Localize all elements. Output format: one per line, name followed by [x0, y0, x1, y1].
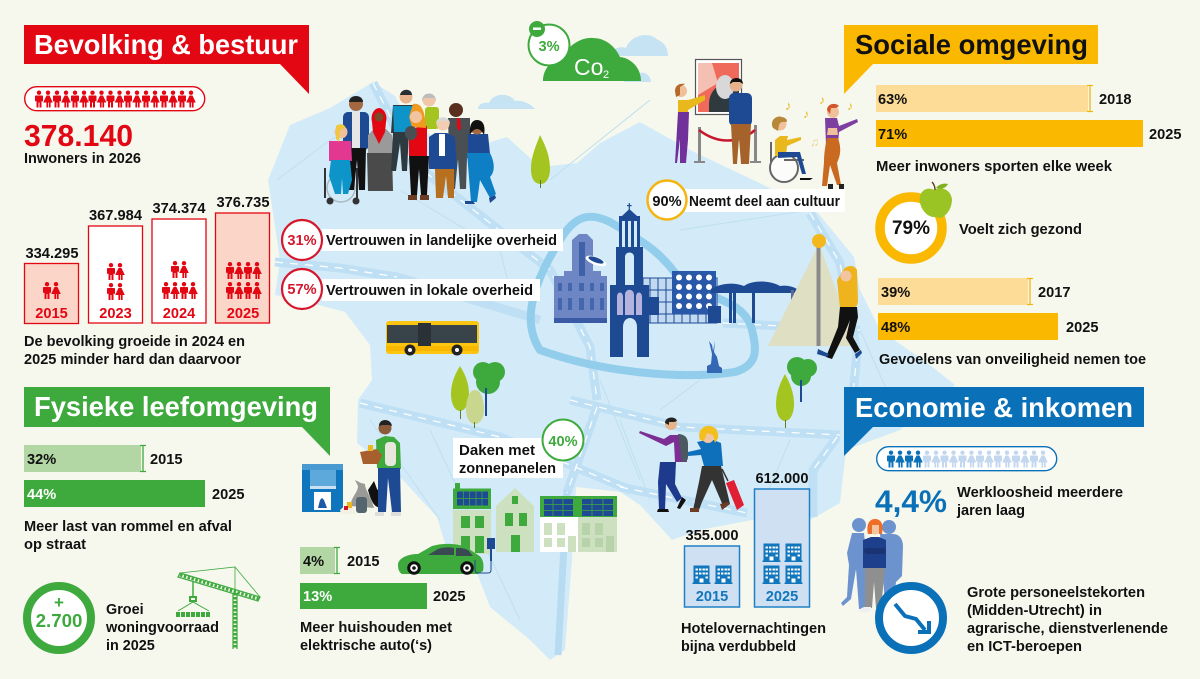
panel: bevolking & bestuur: [24, 25, 309, 368]
heading: sociale omgeving: [844, 25, 1098, 94]
bar chart: rommel: 44%: [27, 487, 56, 503]
caption: personeelstekorten: [967, 585, 1168, 655]
bar chart: elektrische auto's: 4%: [303, 554, 324, 570]
housing growth ring: [27, 586, 91, 650]
bar 2015: 2015: [35, 306, 68, 322]
illustration: man with waste and bin: [302, 420, 401, 516]
bar chart: elektrische auto's: 2025: [433, 589, 465, 605]
bar 2025: 612.000: [756, 471, 808, 487]
icon: CO2 cloud: 2: [603, 69, 609, 81]
man carrying box: [360, 420, 401, 516]
caption: gezond: Voelt zich gezond: [959, 222, 1082, 238]
bar 2023: [88, 208, 143, 323]
bar chart: rommel: [24, 445, 244, 507]
gabled house: [496, 488, 534, 552]
dancer: ♪: [819, 93, 825, 107]
caption: hotel nights: Hotelovernachtingen: [681, 621, 826, 637]
illustration: electric car and charger: [398, 538, 495, 575]
dancer: ♪: [785, 98, 792, 113]
illustration: workers with silhouettes: [841, 518, 903, 613]
trust in national government: 31%: [287, 233, 317, 249]
bar chart: onveiligheid: 2025: [1066, 320, 1098, 336]
dancer: ♪: [803, 107, 809, 121]
caption: hotel nights: [681, 621, 826, 655]
bar 2023: 2023: [99, 306, 132, 322]
rooftop solar label: [453, 420, 584, 478]
caption: woningvoorraad: [105, 602, 219, 654]
bar 2024: [152, 201, 206, 323]
caption: personeelstekorten: (Midden-Utrecht) in: [967, 603, 1102, 619]
bar chart: onveiligheid: 39%: [881, 285, 910, 301]
trust in national government: [282, 220, 563, 260]
bar chart: sport: 71%: [878, 127, 907, 143]
caption: werkloosheid: [956, 485, 1123, 519]
caption: woningvoorraad: in 2025: [106, 638, 155, 654]
bar chart: rommel: 32%: [27, 452, 56, 468]
rooftop solar label: 40%: [548, 434, 578, 450]
bar chart: elektrische auto's: 2015: [347, 554, 379, 570]
rooftop solar label: Daken met: [459, 443, 535, 459]
wheelchair person: [770, 117, 813, 182]
hare statue: [707, 341, 722, 373]
caption: sport: Meer inwoners sporten elke week: [876, 159, 1113, 175]
big number inwoners: [24, 120, 141, 167]
caption: woningvoorraad: woningvoorraad: [105, 620, 219, 636]
painting with visitors: [675, 60, 761, 164]
bar chart: elektrische auto's: [300, 547, 465, 609]
bar chart: onveiligheid: [878, 278, 1098, 340]
culture participation: Neemt deel aan cultuur: [689, 194, 840, 210]
row houses with solar roof: [540, 496, 617, 552]
bar chart: rommel: 2015: [150, 452, 182, 468]
housing growth ring: 2.700: [36, 610, 82, 631]
big number inwoners: 378.140: [24, 120, 133, 153]
heading: economie & inkomen: [844, 387, 1144, 456]
caption: rommel: Meer last van rommel en afval: [24, 519, 232, 535]
CO2 minus 3 percent: 3%: [538, 39, 560, 55]
panel: sociale omgeving: [844, 25, 1181, 368]
bar chart: population: [24, 195, 270, 324]
caption: personeelstekorten: agrarische, dienstverlenende: [967, 621, 1168, 637]
bar 2015: 355.000: [686, 528, 738, 544]
caption: elektrische auto's: elektrische auto(‘s): [300, 638, 432, 654]
bar chart: rommel: 2025: [212, 487, 244, 503]
heading: economie & inkomen: Economie & inkomen: [855, 392, 1133, 423]
bar 2025: [216, 195, 270, 323]
culture participation: [648, 180, 845, 220]
housing growth ring: +: [54, 593, 64, 612]
trees: [451, 135, 817, 428]
Dom tower: [610, 203, 649, 357]
pictogram strip population: [25, 87, 205, 111]
heading: bevolking & bestuur: [24, 25, 309, 94]
bar 2025: [754, 471, 810, 607]
bar 2015: [24, 246, 78, 324]
caption: personeelstekorten: Grote personeelstekorten: [967, 585, 1145, 601]
grid building: [643, 271, 721, 323]
heading: fysieke leefomgeving: Fysieke leefomgeving: [34, 391, 318, 422]
caption: bevolking groei: [24, 334, 245, 368]
bar 2025: 376.735: [216, 195, 270, 211]
canopy station roof: [711, 282, 797, 323]
caption: werkloosheid: Werkloosheid meerdere: [957, 485, 1123, 501]
caption: personeelstekorten: en ICT-beroepen: [967, 639, 1082, 655]
illustration: woman under street lamp: [768, 234, 862, 359]
trust in local government: [282, 269, 540, 309]
panel: economie & inkomen: [841, 387, 1168, 655]
dancer: [785, 93, 858, 189]
canal ring: [531, 217, 755, 375]
icon: CO2 cloud: Co: [574, 54, 603, 80]
caption: hotel nights: bijna verdubbeld: [681, 639, 796, 655]
caption: rommel: [24, 519, 232, 553]
bar chart: hotel nights: [684, 471, 810, 607]
bar 2025: 2025: [766, 589, 798, 605]
background map of Utrecht: [268, 82, 955, 660]
ring road: [275, 83, 860, 655]
trust in national government: Vertrouwen in landelijke overheid: [326, 233, 557, 249]
dancer: ♪: [847, 99, 853, 113]
bar chart: elektrische auto's: 13%: [303, 589, 332, 605]
illustration: Utrecht skyline: [554, 203, 797, 373]
caption: bevolking groei: De bevolking groeide in 2024 en: [24, 334, 245, 350]
panel: fysieke leefomgeving: [24, 387, 330, 654]
caption: woningvoorraad: Groei: [106, 602, 144, 618]
city hall building: [554, 234, 608, 323]
caption: bevolking groei: 2025 minder hard dan daarvoor: [24, 352, 241, 368]
health ring with apple: [880, 182, 952, 259]
big number werkloosheid: 4,4%: [875, 483, 947, 519]
caption: elektrische auto's: [300, 620, 452, 654]
bar 2024: 2024: [163, 306, 196, 322]
heading: fysieke leefomgeving: [24, 387, 330, 456]
bar 2024: 374.374: [152, 201, 206, 217]
caption: onveiligheid: Gevoelens van onveiligheid nemen toe: [879, 352, 1146, 368]
big number inwoners: Inwoners in 2026: [24, 151, 141, 167]
dancer: ♫: [810, 135, 819, 149]
caption: werkloosheid: jaren laag: [956, 503, 1025, 519]
garbage bags: [340, 480, 383, 514]
trust in local government: 57%: [287, 282, 317, 298]
bar chart: sport: 2025: [1149, 127, 1181, 143]
clouds: [478, 35, 668, 109]
icon: construction crane: [176, 567, 260, 649]
litter bin: [302, 464, 343, 512]
illustration: diverse group of residents: [325, 90, 496, 204]
caption: elektrische auto's: Meer huishouden met: [300, 620, 452, 636]
bar 2015: 2015: [696, 589, 728, 605]
icon: staff shortage arrow: [879, 586, 943, 650]
bar chart: onveiligheid: 48%: [881, 320, 910, 336]
bar chart: onveiligheid: 2017: [1038, 285, 1070, 301]
rooftop solar label: zonnepanelen: [459, 461, 556, 477]
CO2 badge: [528, 21, 641, 81]
caption: rommel: op straat: [24, 537, 86, 553]
bar 2015: 334.295: [26, 246, 78, 262]
bar 2025: 2025: [227, 306, 259, 322]
health ring with apple: 79%: [892, 218, 930, 239]
bar chart: sport: 2018: [1099, 92, 1131, 108]
bar 2015: [684, 528, 740, 607]
heading: sociale omgeving: Sociale omgeving: [855, 29, 1088, 60]
illustration: tourists with suitcase: [639, 417, 744, 512]
bar chart: sport: [876, 85, 1181, 147]
heading: bevolking & bestuur: Bevolking & bestuur: [34, 29, 298, 60]
culture participation: 90%: [652, 194, 682, 210]
trust in local government: Vertrouwen in lokale overheid: [326, 283, 533, 299]
house with solar roof: [453, 483, 491, 554]
icon: CO2 cloud: [543, 38, 641, 81]
bar chart: sport: 63%: [878, 92, 907, 108]
bar 2023: 367.984: [89, 208, 143, 224]
illustration: city bus: [386, 321, 479, 356]
illustration: houses with solar panels: [453, 483, 617, 554]
illustration: museum and dancers: [675, 60, 858, 189]
pictogram strip unemployment: [877, 447, 1057, 471]
